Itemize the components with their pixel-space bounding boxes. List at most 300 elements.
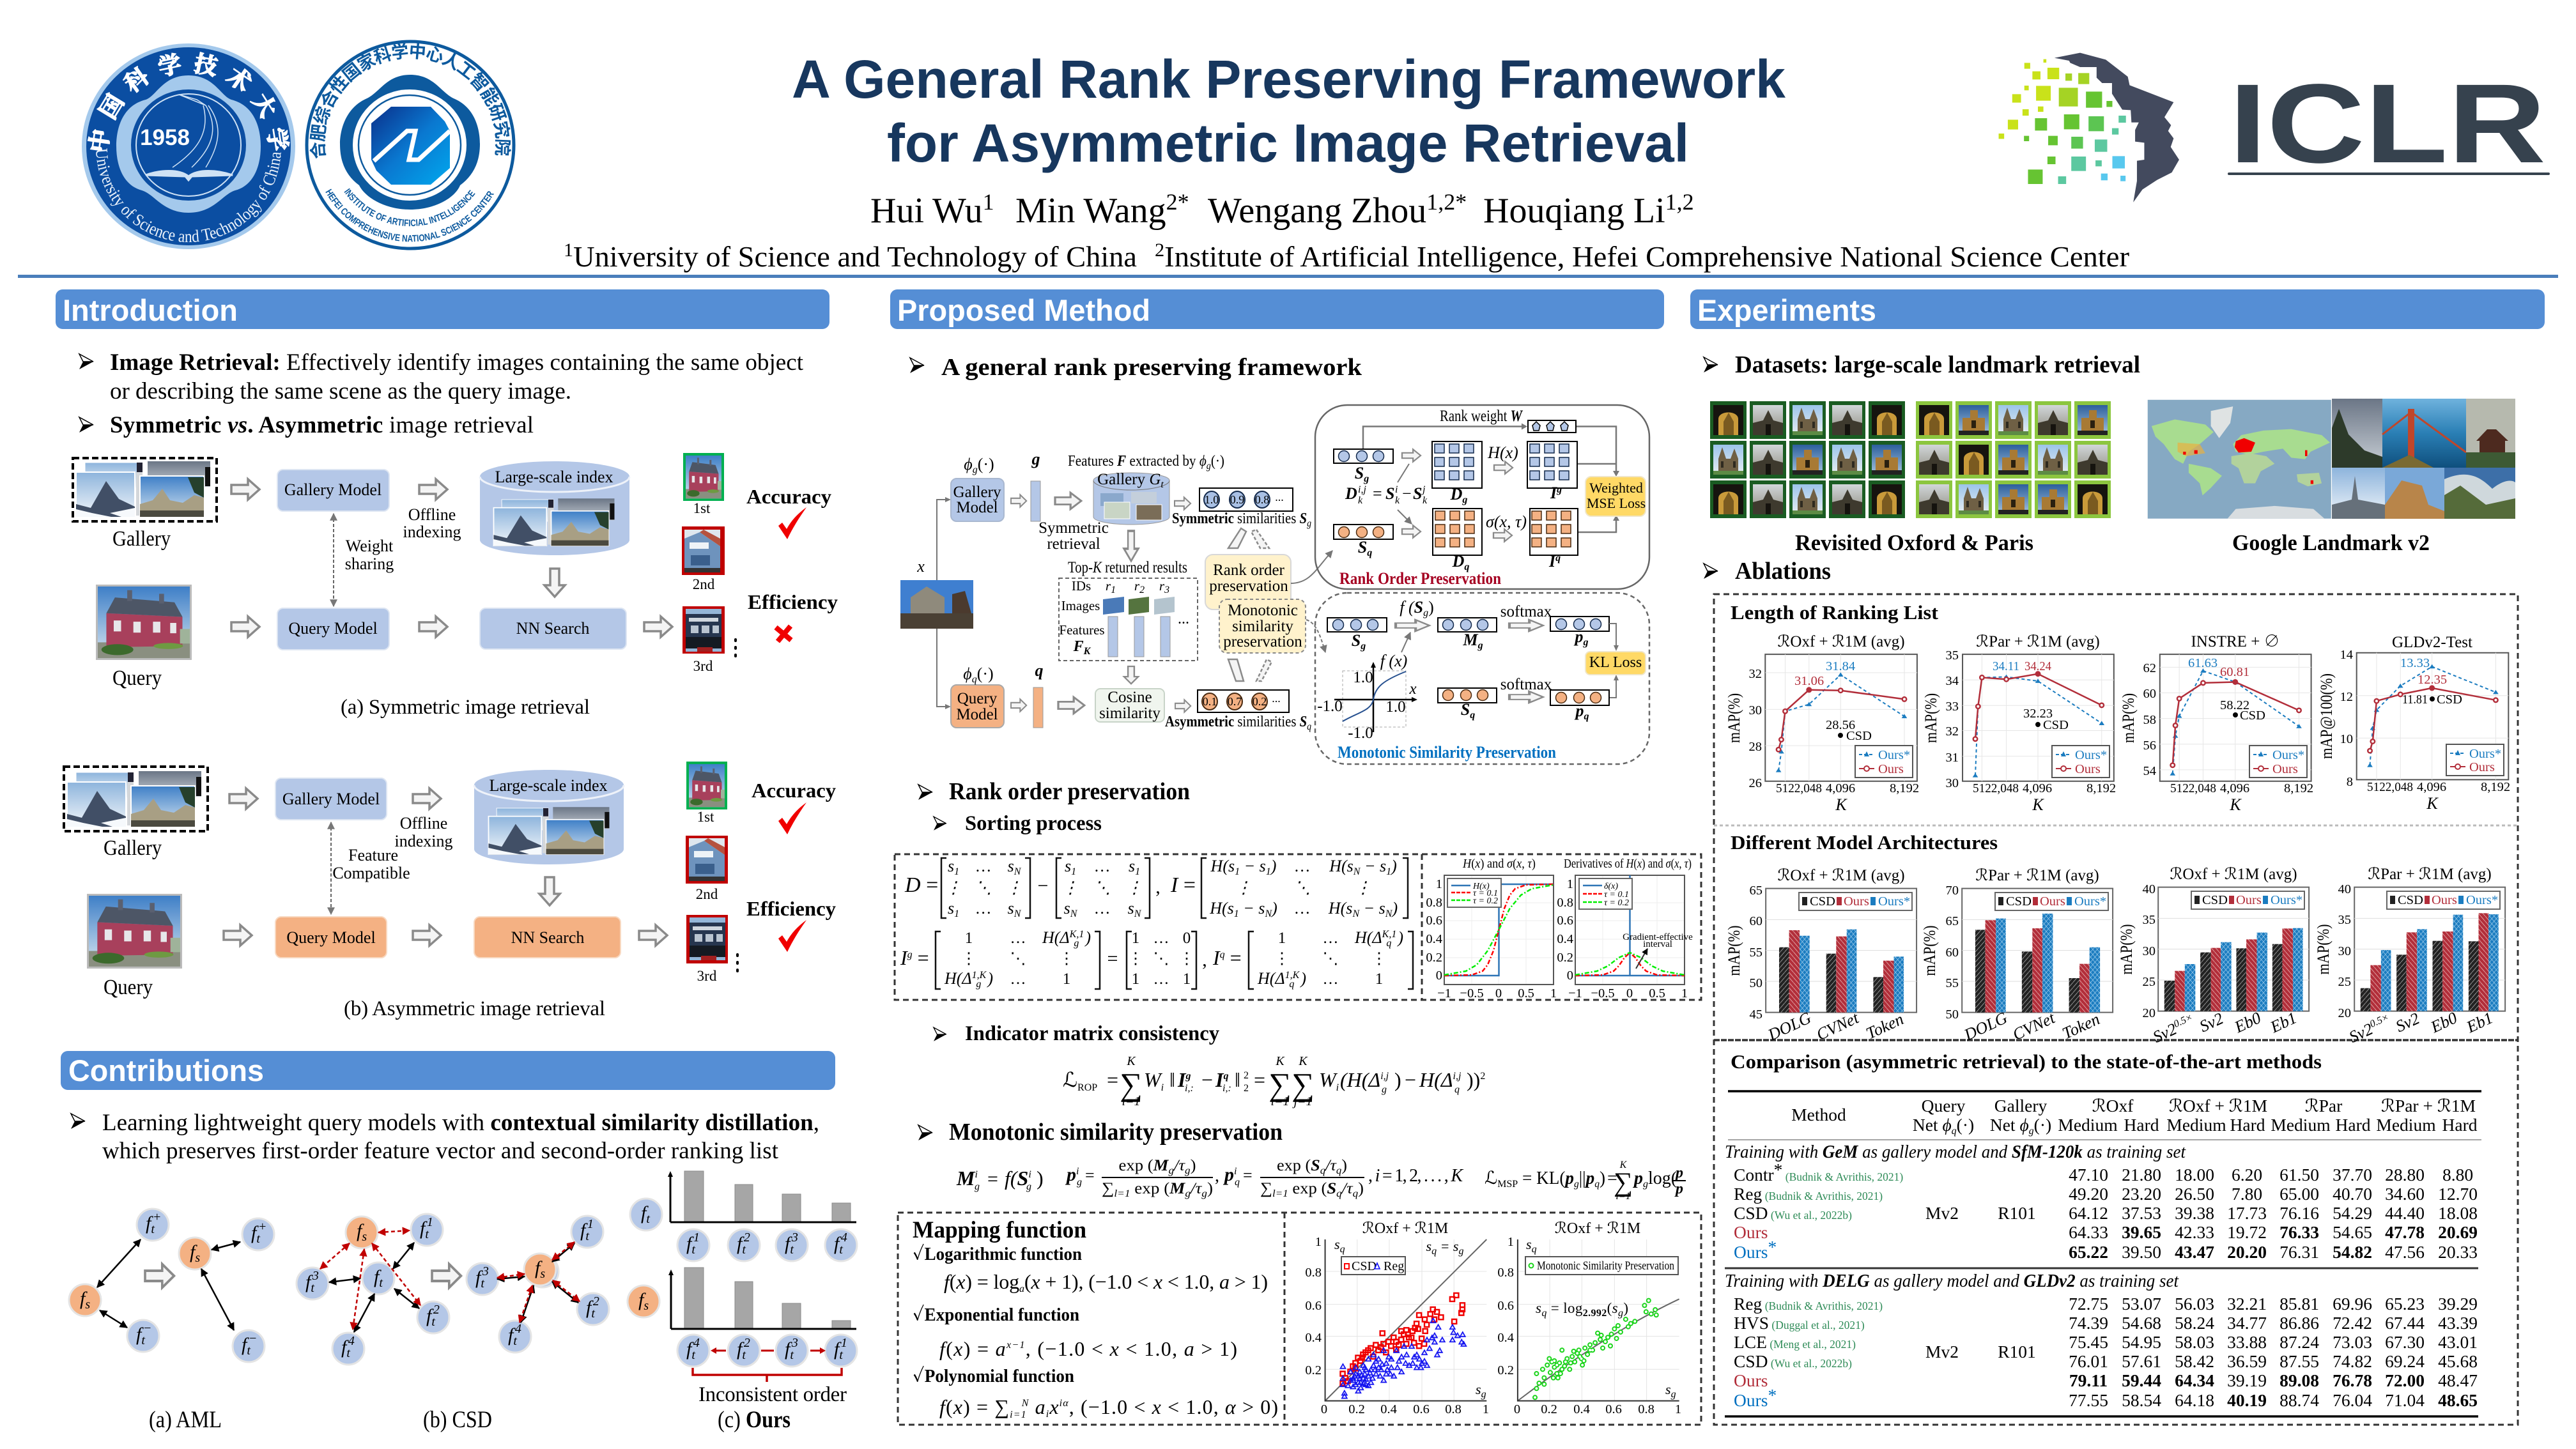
chart: scatter CSD and Reg: 0.2 xyxy=(1348,1402,1365,1416)
equations: monotonic similarity: , xyxy=(1215,1166,1219,1186)
equation: ROP loss: ∑ xyxy=(1292,1066,1315,1102)
chart: derivatives: 0.6 xyxy=(1557,914,1573,928)
diagram: AML: (a) AML xyxy=(149,1407,222,1433)
table group: GeM: 64.12 xyxy=(2069,1203,2108,1223)
panel: monotonic similarity preservation: f (S xyxy=(1400,598,1423,617)
line chart: RPar + R1M xyxy=(1922,633,2116,814)
panel: length of ranking list xyxy=(1725,601,2510,814)
gallery branch: (·) xyxy=(1211,453,1224,470)
line chart: INSTRE: 58 xyxy=(2143,713,2156,727)
preservation boxes: preservation xyxy=(1223,633,1302,650)
diagram: CSD: f xyxy=(341,1337,346,1358)
text: monotonic similarity preservation heading: Monotonic similarity preservation xyxy=(949,1119,1283,1146)
equation: ROP loss: i=1 xyxy=(1122,1094,1141,1108)
chart: scatter monotonic similarity preservation: 1 xyxy=(1675,1402,1681,1416)
line chart: INSTRE: 4,096 xyxy=(2220,781,2249,795)
bar chart: ROxf + R1M lightweight models: 40 xyxy=(2142,882,2156,896)
table header: ℛPar + ℛ1M xyxy=(2381,1096,2476,1116)
table group: GeM: Ours xyxy=(1734,1242,1768,1262)
diagram: AML: − xyxy=(249,1331,257,1346)
matrix equations: , xyxy=(1155,877,1161,898)
diagram: ours: f xyxy=(737,1233,742,1254)
diagram: symmetric image retrieval: Accuracy xyxy=(746,485,831,508)
panel: rank order preservation: D xyxy=(1453,552,1464,571)
input image: x xyxy=(916,557,925,576)
matrix equations: ⋮ xyxy=(1355,878,1371,897)
bar chart: ROxf + R1M backbones xyxy=(1725,867,1917,1045)
chart: scatter monotonic similarity preservation: 0.6 xyxy=(1497,1299,1514,1313)
bar chart: RPar + R1M backbones: Ours* xyxy=(2074,894,2106,908)
text: mapping function definitions: x < 1.0, a > 1) xyxy=(1110,1337,1237,1360)
gallery branch: Model xyxy=(956,499,998,516)
line chart: RPar + R1M: 5122,048 xyxy=(1973,781,2019,795)
gallery branch: g xyxy=(1207,461,1211,471)
title xyxy=(792,49,1785,173)
panel: different model architectures: Different Model Architectures xyxy=(1731,831,1998,854)
bar chart: RPar + R1M lightweight models: mAP(%) xyxy=(2314,924,2333,975)
matrix equations: 1 xyxy=(1235,866,1240,877)
line chart: INSTRE: 62 xyxy=(2143,661,2156,675)
table header: Medium xyxy=(2166,1115,2226,1135)
table group: DELG: 59.44 xyxy=(2122,1370,2161,1390)
bar chart: ROxf + R1M lightweight models: 25 xyxy=(2142,975,2156,989)
symmetric similarities xyxy=(1172,488,1311,529)
chart: H(x) and sigma: H(x) xyxy=(1472,882,1490,891)
diagram: AML: f xyxy=(80,1288,85,1309)
diagram: CSD: f xyxy=(580,1220,585,1241)
bar chart: RPar + R1M lightweight models: Ours xyxy=(2432,893,2457,907)
table group: DELG: 34.77 xyxy=(2227,1313,2267,1333)
diagram: ours: f xyxy=(686,1338,691,1360)
diagram: asymmetric image retrieval: Offline xyxy=(400,814,447,832)
diagram: asymmetric image retrieval xyxy=(64,762,836,1020)
equation: ROP loss: H(Δ xyxy=(1419,1068,1453,1091)
diagram: AML: t xyxy=(151,1222,155,1236)
line chart: INSTRE: Ours* xyxy=(2272,748,2304,762)
table group: GeM: 18.08 xyxy=(2438,1203,2478,1223)
chart: scatter monotonic similarity preservation: q xyxy=(1532,1244,1537,1255)
panel: monotonic similarity preservation: KL Loss xyxy=(1589,654,1642,671)
diagram: CSD: t xyxy=(585,1229,589,1243)
matrix equations: ⋮ xyxy=(1058,950,1075,967)
heading: proposed method: Proposed Method xyxy=(897,293,1150,327)
line chart: ROxf + R1M: 28.56 xyxy=(1826,718,1855,732)
line chart: GLDv2-Test: 13.33 xyxy=(2400,656,2430,670)
table header: Hard xyxy=(2230,1115,2265,1135)
matrix equations: H(Δ xyxy=(1258,969,1285,988)
symmetric similarities: 0.8 xyxy=(1255,493,1269,506)
diagram: asymmetric image retrieval: 1st xyxy=(697,809,714,825)
matrix equations: … xyxy=(1095,857,1110,875)
panel: rank order preservation: g xyxy=(1462,494,1467,505)
heading: contributions: Contributions xyxy=(68,1054,264,1087)
equations: monotonic similarity: p xyxy=(1674,1181,1683,1197)
equation: ROP loss: ℒ xyxy=(1063,1068,1077,1091)
equations: monotonic similarity: i=1 xyxy=(1616,1191,1631,1202)
diagram: ours: t xyxy=(839,1243,843,1257)
heading: introduction xyxy=(56,289,829,329)
panel: rank order preservation: D xyxy=(1345,484,1357,503)
chart: scatter monotonic similarity preservation: 0.4 xyxy=(1573,1402,1590,1416)
diagram: ours: 3 xyxy=(791,1336,798,1350)
chart: H(x) and sigma: τ = 0.1 xyxy=(1473,889,1498,898)
text: datasets heading: Datasets: large-scale landmark retrieval xyxy=(1735,351,2140,378)
matrix equations: ⋮ xyxy=(1274,950,1290,967)
bar chart: RPar + R1M lightweight models: 0.5× xyxy=(2368,1012,2391,1030)
chart: scatter monotonic similarity preservation: 2.992 xyxy=(1583,1308,1607,1319)
table group: DELG: 71.04 xyxy=(2385,1390,2425,1410)
text: mapping function definitions: a xyxy=(1019,1284,1024,1294)
top-K results: r xyxy=(1159,578,1164,594)
query branch: Model xyxy=(956,706,998,723)
chart: scatter CSD and Reg: 0.2 xyxy=(1305,1363,1322,1377)
logo: University of Science and Technology of China xyxy=(82,43,295,249)
text: mapping function definitions: f(x) = a xyxy=(939,1337,1006,1360)
table header: Hard xyxy=(2336,1115,2371,1135)
matrix equations: ) xyxy=(1270,899,1277,917)
title: A General Rank Preserving Framework xyxy=(792,49,1785,109)
text: image retrieval definition: or describing the same scene as the query image. xyxy=(110,378,571,404)
image grid: Revisited Oxford and Paris xyxy=(1710,401,2111,555)
chart: scatter monotonic similarity preservation: ) xyxy=(1623,1300,1628,1316)
matrix equations: … xyxy=(1323,930,1338,947)
line chart: RPar + R1M: 32 xyxy=(1945,724,1959,739)
matrix equations: = xyxy=(913,946,929,969)
diagram: asymmetric image retrieval: Gallery Model xyxy=(282,790,380,808)
bar chart: RPar + R1M backbones: DOLG xyxy=(1961,1008,2010,1045)
diagram: CSD: f xyxy=(357,1220,362,1241)
diagram: ours: s xyxy=(644,1299,649,1313)
panel: introduction xyxy=(56,289,838,1020)
equation: ROP loss: K xyxy=(1298,1054,1308,1068)
chart: scatter CSD and Reg: 0.8 xyxy=(1305,1266,1322,1280)
panel: monotonic similarity preservation: 1.0 xyxy=(1353,669,1373,686)
equations: monotonic similarity: g xyxy=(1185,1165,1191,1176)
chart: derivatives: 1 xyxy=(1681,986,1688,1000)
matrix equations: N xyxy=(1014,908,1022,919)
table group: DELG: 39.29 xyxy=(2438,1294,2478,1314)
diagram: ours: t xyxy=(839,1348,843,1362)
panel: rank order preservation: H(x) xyxy=(1487,443,1518,462)
line chart: RPar + R1M: 30 xyxy=(1945,776,1959,790)
table group: GeM: 39.65 xyxy=(2122,1222,2161,1242)
chart: scatter monotonic similarity preservation: 0.2 xyxy=(1541,1402,1557,1416)
equations: monotonic similarity: ) xyxy=(1341,1157,1347,1174)
table header: Method xyxy=(1791,1105,1846,1124)
top-K results: r xyxy=(1106,578,1111,594)
equation: ROP loss: 2 xyxy=(1244,1070,1249,1081)
equations: monotonic similarity: f(S xyxy=(1005,1167,1028,1190)
diagram: ours: 1 xyxy=(693,1230,700,1245)
bar chart: ROxf + R1M backbones: 50 xyxy=(1750,976,1762,990)
table group: GeM: 28.80 xyxy=(2385,1165,2425,1184)
authors: 1 xyxy=(983,189,994,215)
table group: DELG: 43.01 xyxy=(2438,1332,2478,1352)
preservation boxes xyxy=(1205,528,1332,681)
bar chart: RPar + R1M lightweight models xyxy=(2314,866,2505,1046)
chart: scatter monotonic similarity preservation: = log xyxy=(1547,1300,1583,1316)
diagram: ours: f xyxy=(638,1289,644,1310)
matrix equations: ⋮ xyxy=(1178,950,1195,967)
text: mapping function definitions: ( xyxy=(1024,1270,1031,1293)
bar chart: RPar + R1M lightweight models: 20 xyxy=(2338,1006,2351,1020)
table header: Query xyxy=(1922,1096,1966,1116)
chart: derivatives: 0 xyxy=(1567,969,1573,983)
bar chart: ROxf + R1M backbones: Ours* xyxy=(1878,894,1910,908)
matrix equations: N xyxy=(1385,908,1393,919)
table group: GeM: 8.80 xyxy=(2442,1165,2473,1184)
line chart: RPar + R1M: 8,192 xyxy=(2086,781,2116,795)
diagram: ours: t xyxy=(646,1212,650,1226)
equations: monotonic similarity: M xyxy=(956,1167,976,1190)
table group: DELG: 72.00 xyxy=(2385,1370,2425,1390)
equation: ROP loss: i xyxy=(1161,1082,1164,1093)
equations: monotonic similarity: i xyxy=(1076,1166,1079,1177)
line chart: INSTRE: 8,192 xyxy=(2284,781,2313,795)
table group: GeM: 47.78 xyxy=(2385,1222,2425,1242)
panel: rank order preservation: S xyxy=(1413,484,1422,503)
chart: scatter monotonic similarity preservation: 0 xyxy=(1514,1402,1520,1416)
matrix equations: ⋱ xyxy=(1094,878,1111,897)
text: mapping function definitions: N xyxy=(1021,1398,1030,1409)
table group: GeM: 47.10 xyxy=(2069,1165,2108,1184)
diagram: ours: t xyxy=(790,1243,794,1257)
line chart: GLDv2-Test: Ours xyxy=(2469,760,2495,774)
table group: DELG: 65.23 xyxy=(2385,1294,2425,1314)
chart: scatter monotonic similarity preservation: s xyxy=(1526,1236,1532,1252)
table group: GeM: 76.16 xyxy=(2279,1203,2319,1223)
matrix equations: … xyxy=(1323,970,1338,988)
symmetric similarities: 1.0 xyxy=(1205,493,1219,506)
equations: monotonic similarity: = KL(p xyxy=(1522,1169,1574,1188)
panel: rank order preservation: k xyxy=(1423,495,1428,506)
table group: GeM: 43.47 xyxy=(2175,1242,2214,1262)
table group: DELG: 86.86 xyxy=(2279,1313,2319,1333)
diagram: asymmetric image retrieval: (b) Asymmetric image retrieval xyxy=(344,997,605,1020)
query branch: ... xyxy=(1272,692,1281,705)
bar chart: ROxf + R1M backbones: Ours xyxy=(1844,894,1869,908)
panel: rank order preservation: − xyxy=(1402,484,1412,503)
diagram: asymmetric image retrieval: Query xyxy=(104,976,153,999)
chart: scatter CSD and Reg: g xyxy=(1481,1389,1486,1400)
table group: GeM: (Budnik & Avrithis, 2021) xyxy=(1782,1170,1903,1183)
equations: monotonic similarity: exp (S xyxy=(1277,1157,1320,1174)
panel: rank order preservation: S xyxy=(1355,464,1364,482)
matrix equations: H(s xyxy=(1210,899,1234,917)
equations: monotonic similarity: , i = 1, 2, . . . , K xyxy=(1368,1166,1463,1186)
equations: monotonic similarity: p xyxy=(1674,1165,1683,1181)
diagram: ours: f xyxy=(834,1338,839,1360)
table group: GeM: Mv2 xyxy=(1925,1203,1959,1223)
diagram: CSD: f xyxy=(508,1324,513,1346)
line chart: INSTRE xyxy=(2119,633,2313,814)
logo: University of Science and Technology of China: University of Science and Technology of China xyxy=(96,148,281,242)
diagram: AML: t xyxy=(141,1333,145,1347)
image grid: Revisited Oxford and Paris: Revisited Oxford & Paris xyxy=(1795,530,2033,555)
diagram: ours: 3 xyxy=(791,1230,798,1245)
authors: Min Wang xyxy=(1015,191,1166,231)
text: mapping function definitions: Mapping function xyxy=(913,1217,1086,1243)
line chart: RPar + R1M: 33 xyxy=(1945,700,1959,714)
matrix equations: − s xyxy=(1360,857,1386,875)
table group: DELG: Ours xyxy=(1734,1370,1768,1390)
diagram: CSD: t xyxy=(346,1346,350,1360)
top-K results: Top-K returned results xyxy=(1068,559,1187,576)
matrix equations: ⋮ xyxy=(1062,878,1079,897)
bar chart: RPar + R1M lightweight models: 30 xyxy=(2338,944,2351,958)
matrix equations: ) xyxy=(1084,928,1091,947)
diagram: CSD: 1 xyxy=(587,1217,594,1231)
affiliations: University of Science and Technology of China xyxy=(573,240,1137,273)
table header xyxy=(1791,1096,2478,1137)
line chart: ROxf + R1M: Ours xyxy=(1878,762,1904,776)
diagram: CSD: f xyxy=(426,1305,431,1326)
table group: DELG: 58.42 xyxy=(2175,1351,2214,1371)
table group: GeM: 7.80 xyxy=(2232,1184,2262,1204)
matrix equations: ⋮ xyxy=(1127,950,1144,967)
matrix equations: I xyxy=(1213,946,1220,969)
diagram: AML: f xyxy=(136,1324,141,1345)
table group: DELG: 58.03 xyxy=(2175,1332,2214,1352)
gallery branch: Gallery G xyxy=(1097,471,1161,488)
matrix equations: N xyxy=(1134,908,1142,919)
table header: q xyxy=(1952,1126,1957,1137)
table group: DELG: 36.59 xyxy=(2227,1351,2267,1371)
bar chart: ROxf + R1M lightweight models: 20 xyxy=(2142,1006,2156,1020)
equations: monotonic similarity: ) xyxy=(1037,1167,1044,1190)
matrix equations: H(Δ xyxy=(1355,928,1382,947)
divider xyxy=(1714,824,2518,827)
line chart: RPar + R1M: CSD xyxy=(2043,718,2069,732)
table group: GeM: 20.33 xyxy=(2438,1242,2478,1262)
line chart: INSTRE: 5122,048 xyxy=(2170,781,2216,795)
chart: derivatives: −0.5 xyxy=(1591,986,1615,1000)
equations: monotonic similarity: l=1 xyxy=(1272,1188,1288,1199)
diagram: asymmetric image retrieval: Large-scale index xyxy=(489,776,608,795)
text: mapping function definitions: , (−1.0 < xyxy=(1026,1337,1109,1360)
diagram: symmetric image retrieval: 1st xyxy=(693,500,711,516)
diagram: asymmetric image retrieval: Gallery xyxy=(104,836,162,860)
logo: ICLR: ICLR xyxy=(2229,61,2546,187)
query branch: Cosine xyxy=(1107,689,1152,706)
table group: DELG: 54.68 xyxy=(2122,1313,2161,1333)
table header: Medium xyxy=(2271,1115,2331,1135)
gallery branch: t xyxy=(1161,479,1164,490)
chart: H(x) and sigma: 0 xyxy=(1495,986,1502,1000)
table group: GeM: 26.50 xyxy=(2175,1184,2214,1204)
equations: monotonic similarity: i xyxy=(1234,1166,1237,1177)
diagram: symmetric image retrieval: Gallery xyxy=(112,527,171,551)
chart: scatter CSD and Reg: 0.6 xyxy=(1413,1402,1430,1416)
chart: scatter monotonic similarity preservation: 0.6 xyxy=(1605,1402,1622,1416)
table header: Net ϕ xyxy=(1913,1115,1952,1135)
equation: ROP loss xyxy=(1063,1054,1485,1108)
line chart: GLDv2-Test: 10 xyxy=(2340,732,2353,746)
bar chart: ROxf + R1M backbones: 45 xyxy=(1750,1008,1762,1022)
table group: GeM xyxy=(1725,1142,2478,1262)
diagram: CSD: f xyxy=(535,1257,540,1278)
matrix equations: ) xyxy=(1396,928,1403,947)
diagram: CSD: s xyxy=(540,1267,545,1281)
matrix equations: ⋮ xyxy=(1126,878,1143,897)
authors: Houqiang Li xyxy=(1483,191,1665,231)
heading: proposed method xyxy=(890,289,1664,329)
line chart: GLDv2-Test: 11.81 xyxy=(2402,693,2428,707)
bar chart: RPar + R1M lightweight models: 25 xyxy=(2338,975,2351,989)
diagram: symmetric image retrieval: Weight xyxy=(346,537,394,555)
bar chart: RPar + R1M lightweight models: Eb0 xyxy=(2427,1008,2460,1037)
matrix equations: N xyxy=(1352,908,1360,919)
equations: monotonic similarity: ) xyxy=(1358,1180,1364,1197)
diagram: ours: 2 xyxy=(744,1230,750,1245)
line chart: INSTRE: CSD xyxy=(2240,709,2265,723)
matrix equations: H(s xyxy=(1329,899,1352,917)
panel: monotonic similarity preservation: x xyxy=(1408,680,1417,698)
bar chart: ROxf + R1M lightweight models: mAP(%) xyxy=(2117,924,2136,975)
chart: scatter CSD and Reg: s xyxy=(1476,1381,1481,1397)
matrix equations: s xyxy=(948,899,954,917)
diagram: AML: + xyxy=(258,1220,266,1234)
diagram: CSD: t xyxy=(481,1276,484,1291)
symmetric similarities: 0.9 xyxy=(1230,493,1244,506)
matrix equations: … xyxy=(1095,899,1110,917)
line chart: INSTRE: Ours xyxy=(2272,762,2298,776)
equations: monotonic similarity: exp (M xyxy=(1118,1157,1168,1174)
table group: GeM: 65.22 xyxy=(2069,1242,2108,1262)
diagram: ours: f xyxy=(785,1233,790,1254)
chart: derivatives: δ(x) xyxy=(1604,882,1618,891)
equation: ROP loss: i=1 xyxy=(1270,1094,1290,1108)
equations: monotonic similarity: p xyxy=(1224,1164,1234,1185)
table group: GeM: 20.20 xyxy=(2227,1242,2267,1262)
diagram: asymmetric image retrieval: Accuracy xyxy=(752,779,836,802)
matrix equations: … xyxy=(1010,930,1026,947)
matrix equations: H(s xyxy=(1211,857,1235,875)
equations: monotonic similarity: g xyxy=(975,1181,980,1192)
authors: 1,2 xyxy=(1665,189,1694,215)
panel: rank order preservation: I xyxy=(1549,552,1555,571)
panel: rank order preservation: k xyxy=(1358,495,1363,506)
panel: monotonic similarity preservation: M xyxy=(1463,631,1478,649)
table group: GeM: 76.31 xyxy=(2279,1242,2319,1262)
matrix equations: … xyxy=(1153,930,1169,947)
chart: scatter CSD and Reg: CSD xyxy=(1352,1259,1377,1273)
table group: GeM: CSD (Wu et al., 2022b) xyxy=(1734,1203,1852,1223)
matrix equations: N xyxy=(1353,866,1361,877)
logo: Institute of Artificial Intelligence: INSTITUTE OF ARTIFICIAL INTELLIGENCE xyxy=(344,188,475,226)
query branch: (·) xyxy=(977,664,994,683)
bar chart: RPar + R1M lightweight models: ℛPar + ℛ1M (avg) xyxy=(2368,866,2492,883)
line chart: INSTRE: mAP(%) xyxy=(2119,693,2138,743)
equations: monotonic similarity: ) xyxy=(1207,1180,1213,1197)
panel: experiments xyxy=(1690,289,2545,1425)
heading: contributions xyxy=(61,1051,835,1090)
diagram: CSD: 3 xyxy=(482,1264,489,1278)
diagram: CSD: 2 xyxy=(433,1303,440,1317)
diagram: CSD: t xyxy=(425,1227,429,1241)
matrix equations: 1 xyxy=(965,930,973,947)
matrix equations: ⋱ xyxy=(1323,950,1338,967)
equation: ROP loss: ) xyxy=(1394,1068,1401,1091)
panel: rank order preservation: q xyxy=(1555,553,1561,564)
diagram: asymmetric image retrieval: 2nd xyxy=(696,886,718,902)
panel: monotonic similarity preservation: softmax xyxy=(1500,676,1552,693)
bar chart: RPar + R1M lightweight models: Ours* xyxy=(2466,893,2498,907)
panel: rank order preservation: Rank weight W xyxy=(1440,408,1523,425)
table group: GeM: 54.82 xyxy=(2333,1242,2372,1262)
panel: monotonic similarity preservation: p xyxy=(1575,627,1584,646)
equations: monotonic similarity: ∑ xyxy=(1260,1180,1272,1197)
